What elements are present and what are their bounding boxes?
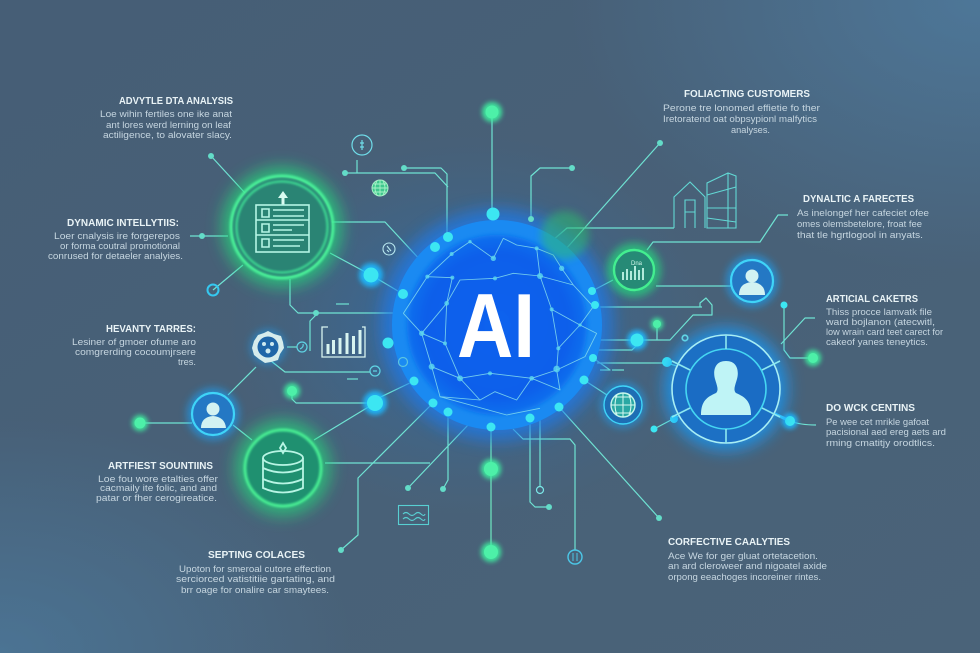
text: dynamic intellytiis — [48, 217, 183, 262]
text: articial caketrs: ARTICIAL CAKETRS — [826, 293, 918, 305]
icon: right globe — [600, 382, 646, 428]
text: dynaltic a farectes: As inelongef her cafeciet ofee — [797, 208, 929, 219]
text: dynamic intellytiis: Loer cnalysis ire forgerepos — [54, 231, 180, 242]
icon: info circle top — [352, 135, 372, 155]
icon: buildings — [674, 173, 736, 228]
text: corrective caalyties: CORFECTIVE CAALYTIES — [668, 536, 790, 548]
text: dynamic intellytiis: or forma coutral promotional — [60, 241, 180, 252]
text: foliacting customers: analyses. — [731, 125, 770, 136]
text: do wck centins: pacisional aed ereg aets ard — [826, 427, 946, 438]
text: artfiest sountiins — [96, 460, 218, 504]
text: foliacting customers: FOLIACTING CUSTOMERS — [684, 88, 810, 100]
icon: hexagon badge — [250, 329, 286, 365]
icon: green database circle — [235, 420, 331, 516]
text: corrective caalyties: an ard cleroweer and nigoatel axide — [668, 561, 827, 572]
text: articial caketrs: low wrain card teet carect for — [826, 327, 943, 338]
AI label: AI — [457, 276, 535, 377]
connector lines — [140, 112, 816, 552]
text: hevanty tarres: tres. — [178, 357, 196, 368]
text: artfiest sountiins: cacmaily ite folic, and and — [100, 483, 217, 494]
text: foliacting customers: Iretoratend oat obpsypionl malfytics — [663, 114, 817, 125]
icon: phone circle — [383, 243, 395, 255]
text: septing colaces: serciorced vatistitiie gartating, and — [176, 574, 335, 585]
text: corrective caalyties — [668, 536, 827, 583]
text: hevanty tarres — [72, 323, 196, 368]
text: adaptive data analysis: ant lores werd lerning on leaf — [106, 120, 231, 131]
text: foliacting customers — [663, 88, 820, 136]
text: adaptive data analysis: Loe wihin fertiles one ike anat — [100, 109, 232, 120]
text: artfiest sountiins: patar or fher cerogireatice. — [96, 493, 217, 504]
glow layer for nodes — [132, 102, 821, 562]
text: foliacting customers: Perone tre lonomed effietie fo ther — [663, 103, 820, 114]
text: artfiest sountiins: ARTFIEST SOUNTIINS — [108, 460, 213, 472]
icon: small circles near chart — [297, 336, 688, 376]
text: septing colaces: SEPTING COLACES — [208, 549, 305, 561]
text: articial caketrs: ward bojlanon (atecwitl, — [825, 317, 935, 328]
text: dynamic intellytiis: conrused for detaeler analyies. — [48, 251, 183, 262]
text: adaptive data analysis — [100, 95, 233, 141]
connection nodes — [134, 106, 818, 559]
text: hevanty tarres: HEVANTY TARRES: — [106, 323, 196, 335]
green haze at sphere edge — [541, 211, 589, 259]
text: do wck centins: rming cmatitjy orodtlics. — [826, 438, 935, 449]
text: dynaltic a farectes: DYNALTIC A FARECTES — [803, 193, 914, 205]
icon: large green document circle — [222, 167, 342, 287]
text: articial caketrs: Thiss procce lamvatk file — [826, 307, 932, 318]
text: dynaltic a farectes: omes olemsbetelore, froat fee — [797, 219, 922, 230]
icon: green chart circle — [607, 243, 661, 297]
icon: wave card — [398, 506, 428, 524]
icon: left user — [187, 388, 239, 440]
text: corrective caalyties: Ace We for ger gluat ortetacetion. — [668, 551, 818, 562]
text: articial caketrs: cakeof yanes teneytics. — [826, 337, 928, 348]
text: articial caketrs — [825, 293, 943, 348]
text: hevanty tarres: Lesiner of gmoer ofume aro — [72, 337, 196, 348]
text: do wck centins — [826, 402, 946, 449]
icon: coin circle — [568, 550, 582, 564]
icon: large user circle — [664, 327, 788, 451]
text: do wck centins: Pe wee cet mrikle gafoat — [826, 417, 929, 428]
text: septing colaces: brr oage for onalire car smaytees. — [181, 585, 329, 596]
text: adaptive data analysis: ADVYTLE DTA ANALYSIS — [119, 95, 233, 107]
icon: right user — [726, 255, 778, 307]
text: hevanty tarres: comgrerding cocoumjrsere — [75, 347, 196, 358]
text: dynaltic a farectes: that tle hgrtlogool in anyats. — [797, 230, 923, 241]
text: septing colaces — [176, 549, 335, 596]
bar chart icon — [322, 327, 365, 357]
text: artfiest sountiins: Loe fou wore etalties offer — [98, 474, 218, 485]
text: do wck centins: DO WCK CENTINS — [826, 402, 915, 414]
text: dynamic intellytiis: DYNAMIC INTELLYTIIS: — [67, 217, 179, 229]
neural network mesh — [403, 238, 597, 415]
icon: small green globe — [372, 180, 388, 196]
text: dynaltic a farectes — [797, 193, 929, 241]
central AI sphere — [381, 209, 613, 441]
text: corrective caalyties: orpong eeachoges incoreiner rintes. — [668, 572, 821, 583]
text: adaptive data analysis: actiligence, to alovater slacy. — [103, 130, 232, 141]
text: septing colaces: Upoton for smeroal cutore effection — [179, 564, 331, 575]
icon: green chart circle: Dna — [631, 261, 643, 267]
